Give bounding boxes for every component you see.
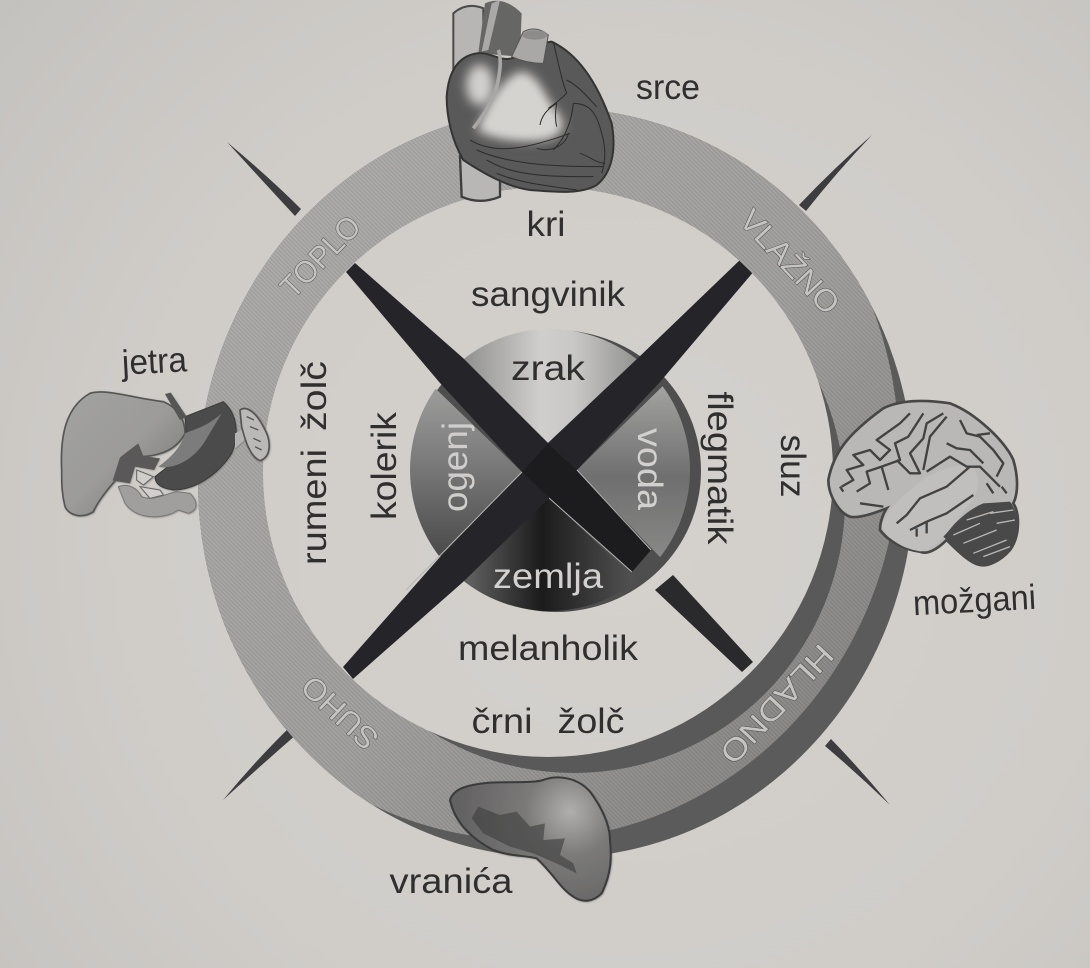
icon: spleen (450, 777, 611, 901)
ring label: SUHO: SUHO (294, 669, 385, 757)
label: rumeni žolč (295, 361, 334, 565)
label: črni žolč (472, 702, 624, 741)
label: zemlja: zemlja (493, 557, 604, 596)
label: črni žolč: črni (472, 702, 532, 741)
label: zrak: zrak (511, 349, 586, 388)
icon: liver and stomach (61, 392, 269, 517)
ring label: TOPLO: TOPLO (273, 209, 368, 305)
label: možgani: možgani (912, 578, 1037, 623)
black X spokes (343, 258, 755, 679)
central elements disc (410, 330, 701, 612)
label: rumeni žolč: rumeni (295, 449, 334, 565)
label: črni žolč: žolč (558, 702, 624, 741)
icon: brain (828, 401, 1018, 565)
label: kri: kri (526, 205, 566, 244)
label: flegmatik: flegmatik (700, 392, 739, 545)
ring label: VLAŽNO: VLAŽNO (733, 202, 847, 321)
label: srce: srce (636, 68, 700, 107)
label: rumeni žolč: žolč (295, 361, 334, 431)
label: sluz: sluz (773, 434, 812, 498)
label: kolerik: kolerik (365, 411, 404, 520)
icon: heart (447, 0, 614, 201)
label: sangvinik: sangvinik (471, 275, 626, 314)
ring label: HLADNO: HLADNO (713, 637, 841, 771)
compass spikes (223, 135, 890, 805)
panel: humour ring (198, 112, 908, 854)
label: vranića: vranića (390, 862, 513, 901)
label: voda: voda (630, 428, 669, 511)
label: ogenj: ogenj (436, 422, 475, 512)
label: melanholik: melanholik (458, 629, 639, 668)
label: jetra: jetra (120, 340, 188, 383)
